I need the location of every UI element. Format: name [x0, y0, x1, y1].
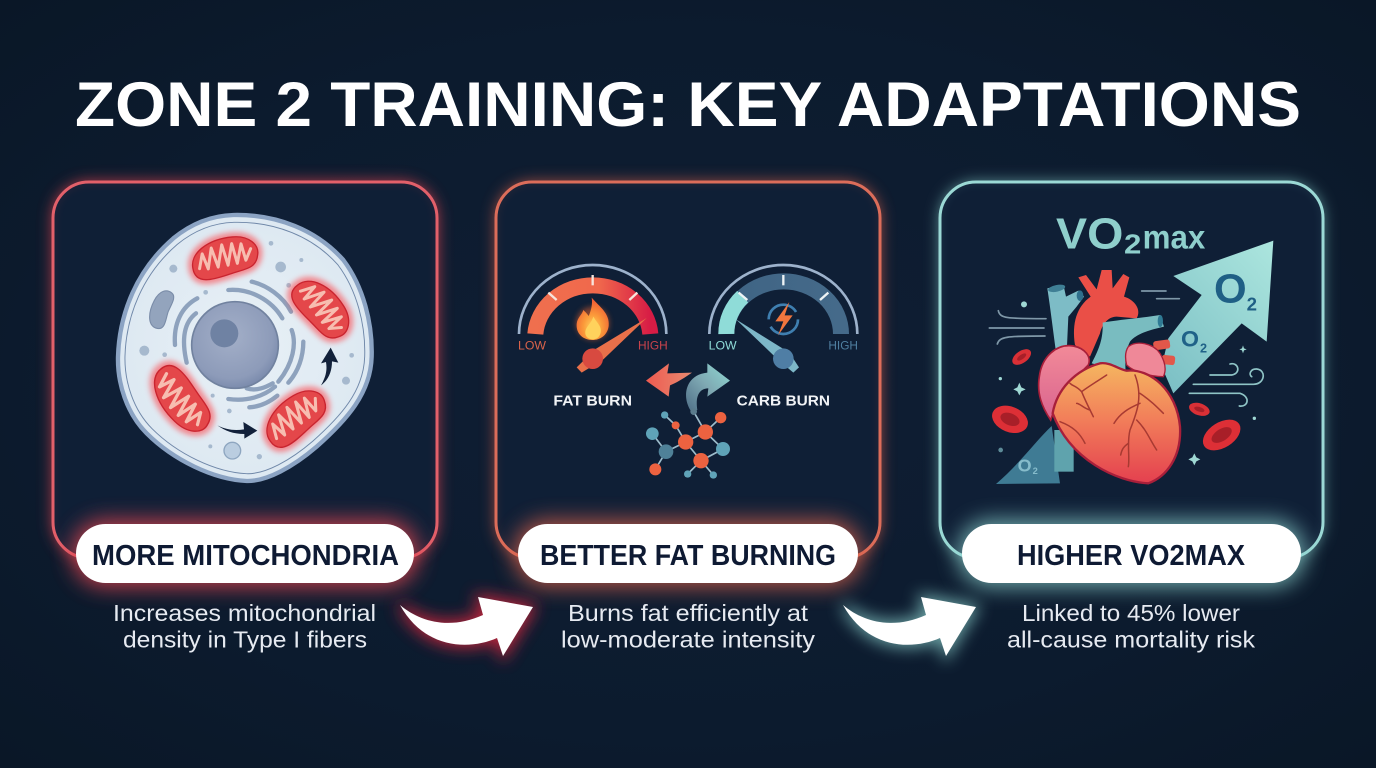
- label pill: MORE MITOCHONDRIA: [92, 540, 399, 572]
- aorta: [1074, 270, 1138, 357]
- oxygen label large: O: [1214, 266, 1247, 312]
- oxygen label large: 2: [1247, 293, 1257, 314]
- inner membrane line: [125, 222, 365, 474]
- description: [113, 600, 376, 652]
- arrow: step one to two: [400, 597, 533, 656]
- molecule: [646, 408, 730, 479]
- left atrium: [1126, 343, 1165, 377]
- cell membrane: [118, 215, 372, 481]
- description: density in Type I fibers: [123, 626, 367, 652]
- oxygen label medium: 2: [1200, 342, 1207, 356]
- illustration: fuel gauges: [518, 265, 858, 479]
- vo2max label: max: [1143, 219, 1206, 256]
- oxygen label large: [1214, 266, 1257, 314]
- wind lines: [989, 291, 1179, 344]
- coronary vessels: [1060, 375, 1163, 467]
- pulmonary veins: [1153, 339, 1175, 365]
- icon: flame: [576, 298, 609, 340]
- arrow: mitochondria multiply (lower): [217, 422, 257, 439]
- description: all-cause mortality risk: [1007, 626, 1256, 652]
- descending vessel: [1054, 430, 1074, 472]
- gauge: fat burn: [518, 265, 668, 410]
- nucleus: [192, 302, 278, 388]
- arrow: switch to carb: [686, 363, 730, 411]
- gauge: carb burn: CARB BURN: [737, 393, 830, 410]
- vesicle: [224, 442, 241, 459]
- sparkles: [998, 301, 1256, 465]
- icon: energy bolt: [769, 302, 798, 335]
- title: ZONE 2 TRAINING: KEY ADAPTATIONS: [75, 70, 1301, 140]
- label pill: [514, 520, 862, 587]
- illustration: muscle cell: [118, 215, 372, 481]
- arrow: switch to fat: [646, 363, 692, 397]
- panel: more mitochondria: [53, 182, 437, 652]
- oxygen label small: O: [1018, 456, 1032, 476]
- description: [1007, 600, 1256, 652]
- gauge: carb burn: [709, 265, 858, 410]
- gauge: fat burn: FAT BURN: [553, 393, 632, 410]
- vo2max label: VO: [1056, 210, 1123, 258]
- illustration: heart and oxygen: [988, 210, 1273, 484]
- gauge: fat burn: HIGH: [638, 338, 668, 352]
- right atrium: [1039, 346, 1089, 420]
- description: Linked to 45% lower: [1022, 600, 1240, 626]
- endoplasmic reticulum: [175, 282, 303, 407]
- panel: higher vo2max: [940, 182, 1323, 652]
- organelle dots: [139, 241, 354, 459]
- needle: [736, 319, 799, 373]
- label pill: HIGHER VO2MAX: [1017, 540, 1245, 572]
- label pill: [958, 520, 1305, 587]
- arrow: mitochondria multiply (right): [321, 348, 338, 385]
- nucleolus: [210, 319, 238, 347]
- arrow tail: [996, 426, 1060, 484]
- label pill: [72, 520, 418, 587]
- pulmonary artery: [1092, 315, 1164, 372]
- panel: better fat burning: [496, 182, 880, 652]
- description: low-moderate intensity: [561, 626, 816, 652]
- mitochondria group: [141, 236, 356, 452]
- description: Increases mitochondrial: [113, 600, 376, 626]
- oxygen label small: 2: [1033, 466, 1038, 476]
- oxygen label medium: [1181, 327, 1207, 356]
- rear vessel: [1047, 286, 1084, 357]
- gauge: carb burn: HIGH: [828, 338, 858, 352]
- needle: [577, 318, 647, 373]
- red blood cells: [988, 346, 1246, 457]
- vo2max label: [1056, 210, 1206, 259]
- arrow: step two to three: [843, 597, 976, 656]
- vo2max label: 2: [1124, 228, 1141, 259]
- gauge: carb burn: LOW: [709, 338, 737, 352]
- gauge: fat burn: LOW: [518, 338, 546, 352]
- label pill: BETTER FAT BURNING: [540, 540, 836, 572]
- description: Burns fat efficiently at: [568, 600, 809, 626]
- oxygen label small: [1018, 456, 1038, 476]
- arrow: rising oxygen: [1162, 241, 1273, 393]
- ventricles: [1053, 363, 1180, 483]
- inactive mitochondrion: [143, 287, 179, 331]
- description: [561, 600, 816, 652]
- oxygen label medium: O: [1181, 327, 1199, 352]
